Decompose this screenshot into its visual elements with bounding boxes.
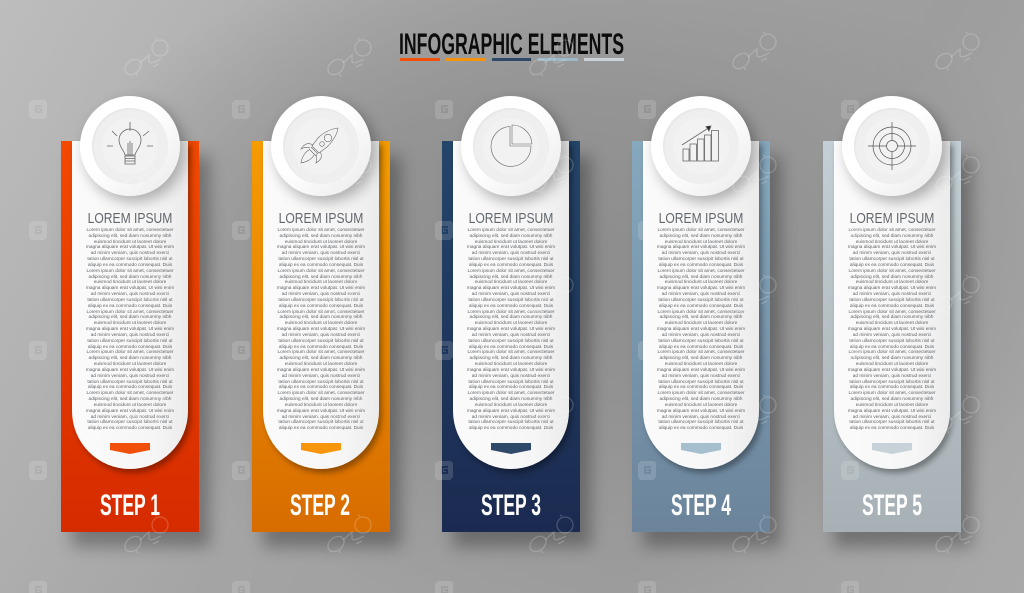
step 5 body text: ad minim veniam, quis nostrud exerci (853, 251, 931, 256)
step 2 body text: tation ullamcorper suscipit lobortis nisl ut (278, 380, 364, 385)
step 5 body text: Lorem ipsum dolor sit amet, consectetuer (848, 269, 936, 274)
step 2 body text: Lorem ipsum dolor sit amet, consectetuer (277, 310, 365, 315)
step 2 body text: euismod tincidunt ut laoreet dolore (285, 321, 357, 326)
step 2 arrow tab (301, 443, 341, 454)
step 3 body text: aliquip ex ea commodo consequat. Duis (469, 304, 553, 309)
step 2 colour card (252, 141, 390, 532)
step 1 body text: aliquip ex ea commodo consequat. Duis (88, 304, 172, 309)
step 4 body text: magna aliquam erat volutpat. Ut wisi enim (657, 286, 745, 291)
step 2 body text: adipiscing elit, sed diam nonummy nibh (280, 356, 362, 361)
step 1 body text: tation ullamcorper suscipit lobortis nisl ut (87, 380, 173, 385)
step 3 body text: tation ullamcorper suscipit lobortis nisl ut (468, 257, 554, 262)
step 3 body text: aliquip ex ea commodo consequat. Duis (469, 263, 553, 268)
step 4 body text: aliquip ex ea commodo consequat. Duis (659, 263, 743, 268)
step 2 body text: ad minim veniam, quis nostrud exerci (282, 292, 360, 297)
step 3 body text: ad minim veniam, quis nostrud exerci (472, 374, 550, 379)
icon: pie chart (490, 124, 532, 167)
step 4 body text: magna aliquam erat volutpat. Ut wisi enim (657, 409, 745, 414)
step 2 body text: euismod tincidunt ut laoreet dolore (285, 403, 357, 408)
step 2 body text: aliquip ex ea commodo consequat. Duis (279, 304, 363, 309)
step 4 body text: euismod tincidunt ut laoreet dolore (665, 240, 737, 245)
step 1 body text: adipiscing elit, sed diam nonummy nibh (89, 315, 171, 320)
step 3 body text: magna aliquam erat volutpat. Ut wisi enim (467, 286, 555, 291)
step 3 body text: magna aliquam erat volutpat. Ut wisi enim (467, 327, 555, 332)
step 2 body text: magna aliquam erat volutpat. Ut wisi enim (277, 286, 365, 291)
step 1 body text: aliquip ex ea commodo consequat. Duis (88, 385, 172, 390)
step 3 body text: aliquip ex ea commodo consequat. Duis (469, 426, 553, 431)
step 2 body text: euismod tincidunt ut laoreet dolore (285, 362, 357, 367)
step 4 body text: aliquip ex ea commodo consequat. Duis (659, 385, 743, 390)
step 4 body text: magna aliquam erat volutpat. Ut wisi enim (657, 245, 745, 250)
step 5 body text: magna aliquam erat volutpat. Ut wisi enim (848, 327, 936, 332)
step 4 body text: Lorem ipsum dolor sit amet, consectetuer (657, 310, 745, 315)
step 4 body text: tation ullamcorper suscipit lobortis nisl ut (658, 257, 744, 262)
step 5 body text: magna aliquam erat volutpat. Ut wisi enim (848, 245, 936, 250)
step 1 body text: aliquip ex ea commodo consequat. Duis (88, 263, 172, 268)
step 5 body text: adipiscing elit, sed diam nonummy nibh (851, 315, 933, 320)
step 3 body text (467, 228, 555, 431)
step 2 body text: magna aliquam erat volutpat. Ut wisi enim (277, 368, 365, 373)
step 5 body text: tation ullamcorper suscipit lobortis nisl ut (849, 339, 935, 344)
step 5 disc (842, 96, 942, 196)
step 5 body text: aliquip ex ea commodo consequat. Duis (850, 426, 934, 431)
step 3 body text: Lorem ipsum dolor sit amet, consectetuer (467, 310, 555, 315)
panel: step 5 (823, 96, 980, 554)
step 2 body text: magna aliquam erat volutpat. Ut wisi enim (277, 327, 365, 332)
step 4 body text: adipiscing elit, sed diam nonummy nibh (660, 275, 742, 280)
step 1 body text: tation ullamcorper suscipit lobortis nisl ut (87, 339, 173, 344)
step 1 body text: ad minim veniam, quis nostrud exerci (91, 292, 169, 297)
step 5 body text: aliquip ex ea commodo consequat. Duis (850, 263, 934, 268)
panel: step 3 (442, 96, 598, 554)
step 5 heading: LOREM IPSUM (850, 211, 934, 227)
step 3 body text: Lorem ipsum dolor sit amet, consectetuer (467, 269, 555, 274)
step 2 body text: ad minim veniam, quis nostrud exerci (282, 333, 360, 338)
step 4 body text: adipiscing elit, sed diam nonummy nibh (660, 234, 742, 239)
step 1 body text: adipiscing elit, sed diam nonummy nibh (89, 275, 171, 280)
step 2 body text: ad minim veniam, quis nostrud exerci (282, 414, 360, 420)
step 4 body text: ad minim veniam, quis nostrud exerci (662, 414, 740, 420)
step 4 body text: ad minim veniam, quis nostrud exerci (662, 292, 740, 297)
step 3 body text: tation ullamcorper suscipit lobortis nisl ut (468, 339, 554, 344)
step 3 arrow tab (491, 443, 531, 454)
step 3 body text: Lorem ipsum dolor sit amet, consectetuer (467, 228, 555, 233)
step 4 body text: aliquip ex ea commodo consequat. Duis (659, 426, 743, 431)
step 2 body text: magna aliquam erat volutpat. Ut wisi enim (277, 245, 365, 250)
step 1 body text: tation ullamcorper suscipit lobortis nisl ut (87, 257, 173, 262)
step 1 body text: magna aliquam erat volutpat. Ut wisi enim (86, 327, 174, 332)
step 5 body text: ad minim veniam, quis nostrud exerci (853, 374, 931, 379)
step 2 body text: tation ullamcorper suscipit lobortis nisl ut (278, 420, 364, 425)
step 1 heading: LOREM IPSUM (88, 211, 172, 227)
step 5 body text: tation ullamcorper suscipit lobortis nisl ut (849, 257, 935, 262)
step 4 body text: Lorem ipsum dolor sit amet, consectetuer (657, 391, 745, 396)
step 1 body text: ad minim veniam, quis nostrud exerci (91, 251, 169, 256)
step 4 body text: aliquip ex ea commodo consequat. Duis (659, 304, 743, 309)
step 1 body text: ad minim veniam, quis nostrud exerci (91, 374, 169, 379)
step 4 white pill (643, 141, 759, 469)
step 4 body text: tation ullamcorper suscipit lobortis nisl ut (658, 298, 744, 303)
step 2 body text: aliquip ex ea commodo consequat. Duis (279, 385, 363, 390)
step 5 white pill (834, 141, 950, 469)
step 3 body text: tation ullamcorper suscipit lobortis nisl ut (468, 380, 554, 385)
step 5 body text: magna aliquam erat volutpat. Ut wisi enim (848, 368, 936, 373)
step 2 disc (271, 96, 371, 196)
step 1 body text: euismod tincidunt ut laoreet dolore (94, 321, 166, 326)
step 1 white pill (72, 141, 188, 469)
step 5 body text: tation ullamcorper suscipit lobortis nisl ut (849, 420, 935, 425)
step 4 body text: Lorem ipsum dolor sit amet, consectetuer (657, 228, 745, 233)
step 3 body text: euismod tincidunt ut laoreet dolore (475, 321, 547, 326)
step 2 body text: aliquip ex ea commodo consequat. Duis (279, 345, 363, 350)
step 5 arrow tab (872, 443, 912, 454)
step 3 white pill (453, 141, 569, 469)
step 4 body text: euismod tincidunt ut laoreet dolore (665, 280, 737, 285)
step 1 body text: Lorem ipsum dolor sit amet, consectetuer (86, 310, 174, 315)
step 2 body text: tation ullamcorper suscipit lobortis nisl ut (278, 257, 364, 262)
step 5 body text: tation ullamcorper suscipit lobortis nisl ut (849, 380, 935, 385)
step 1 colour card (61, 141, 199, 532)
step 4 body text: adipiscing elit, sed diam nonummy nibh (660, 356, 742, 361)
step 3 body text: ad minim veniam, quis nostrud exerci (472, 333, 550, 338)
step 3 body text: adipiscing elit, sed diam nonummy nibh (470, 234, 552, 239)
step 2 body text: Lorem ipsum dolor sit amet, consectetuer (277, 228, 365, 233)
step 1 body text (86, 228, 174, 431)
step 4 body text: euismod tincidunt ut laoreet dolore (665, 362, 737, 367)
step 5 body text: euismod tincidunt ut laoreet dolore (856, 240, 928, 245)
step 3 body text: adipiscing elit, sed diam nonummy nibh (470, 315, 552, 320)
step 3 body text: euismod tincidunt ut laoreet dolore (475, 280, 547, 285)
panel: step 4 (632, 96, 788, 554)
icon: growth bar chart (682, 126, 719, 162)
step 3 body text: euismod tincidunt ut laoreet dolore (475, 240, 547, 245)
step 4 body text: tation ullamcorper suscipit lobortis nisl ut (658, 339, 744, 344)
step 1 body text: magna aliquam erat volutpat. Ut wisi enim (86, 245, 174, 250)
step 5 body text: tation ullamcorper suscipit lobortis nisl ut (849, 298, 935, 303)
step 4 disc (651, 96, 751, 196)
step 5 body text: euismod tincidunt ut laoreet dolore (856, 362, 928, 367)
step 3 body text: adipiscing elit, sed diam nonummy nibh (470, 397, 552, 402)
step 2 body text: ad minim veniam, quis nostrud exerci (282, 374, 360, 379)
step 1 body text: ad minim veniam, quis nostrud exerci (91, 333, 169, 338)
step 5 body text: magna aliquam erat volutpat. Ut wisi enim (848, 286, 936, 291)
step 1 body text: Lorem ipsum dolor sit amet, consectetuer (86, 269, 174, 274)
step 2 body text: aliquip ex ea commodo consequat. Duis (279, 426, 363, 431)
step 4 body text: adipiscing elit, sed diam nonummy nibh (660, 315, 742, 320)
icon: target (868, 122, 916, 170)
panel: step 1 (61, 96, 218, 555)
step 4 body text: tation ullamcorper suscipit lobortis nisl ut (658, 420, 744, 425)
step 5 body text: ad minim veniam, quis nostrud exerci (853, 333, 931, 338)
step 3 body text: adipiscing elit, sed diam nonummy nibh (470, 275, 552, 280)
step 3 body text: adipiscing elit, sed diam nonummy nibh (470, 356, 552, 361)
step 4 body text: ad minim veniam, quis nostrud exerci (662, 333, 740, 338)
step 5 body text: euismod tincidunt ut laoreet dolore (856, 280, 928, 285)
step 2 body text: tation ullamcorper suscipit lobortis nisl ut (278, 339, 364, 344)
step 1 body text: Lorem ipsum dolor sit amet, consectetuer (86, 350, 174, 355)
step 4 body text: euismod tincidunt ut laoreet dolore (665, 321, 737, 326)
icon: light bulb (107, 122, 153, 164)
step 1 body text: euismod tincidunt ut laoreet dolore (94, 362, 166, 367)
step 4 body text: adipiscing elit, sed diam nonummy nibh (660, 397, 742, 402)
step 2 body text: ad minim veniam, quis nostrud exerci (282, 251, 360, 256)
step 5 body text: adipiscing elit, sed diam nonummy nibh (851, 397, 933, 402)
step 1 body text: ad minim veniam, quis nostrud exerci (91, 414, 169, 420)
panel: step 2 (252, 96, 408, 554)
step 3 disc (461, 96, 561, 196)
step 5 body text: adipiscing elit, sed diam nonummy nibh (851, 234, 933, 239)
step 1 body text: magna aliquam erat volutpat. Ut wisi enim (86, 368, 174, 373)
step 4 arrow tab (681, 443, 721, 454)
step 5 body text: aliquip ex ea commodo consequat. Duis (850, 345, 934, 350)
step 3 body text: tation ullamcorper suscipit lobortis nisl ut (468, 420, 554, 425)
step 4 body text: aliquip ex ea commodo consequat. Duis (659, 345, 743, 350)
step 2 body text: Lorem ipsum dolor sit amet, consectetuer (277, 391, 365, 396)
step 3 body text: aliquip ex ea commodo consequat. Duis (469, 345, 553, 350)
step 2 body text: adipiscing elit, sed diam nonummy nibh (280, 234, 362, 239)
step 2 heading: LOREM IPSUM (279, 211, 363, 227)
step 3 body text: Lorem ipsum dolor sit amet, consectetuer (467, 391, 555, 396)
step 5 body text (848, 228, 936, 431)
step 2 body text: aliquip ex ea commodo consequat. Duis (279, 263, 363, 268)
step 1 body text: adipiscing elit, sed diam nonummy nibh (89, 397, 171, 402)
title colour bars (400, 58, 624, 61)
step 1 arrow tab (110, 443, 150, 454)
step 3 body text: aliquip ex ea commodo consequat. Duis (469, 385, 553, 390)
step 4 body text: ad minim veniam, quis nostrud exerci (662, 374, 740, 379)
step 5 body text: ad minim veniam, quis nostrud exerci (853, 292, 931, 297)
step 3 body text: euismod tincidunt ut laoreet dolore (475, 362, 547, 367)
step 5 body text: aliquip ex ea commodo consequat. Duis (850, 304, 934, 309)
step 1 disc (80, 96, 180, 196)
step 3 body text: magna aliquam erat volutpat. Ut wisi enim (467, 368, 555, 373)
step 3 body text: ad minim veniam, quis nostrud exerci (472, 414, 550, 420)
step 4 body text (657, 228, 745, 431)
step 5 body text: Lorem ipsum dolor sit amet, consectetuer (848, 228, 936, 233)
step 4 body text: magna aliquam erat volutpat. Ut wisi enim (657, 368, 745, 373)
step 4 body text: Lorem ipsum dolor sit amet, consectetuer (657, 350, 745, 355)
step 2 body text: Lorem ipsum dolor sit amet, consectetuer (277, 269, 365, 274)
step 1 body text: Lorem ipsum dolor sit amet, consectetuer (86, 391, 174, 396)
step 3 colour card (442, 141, 580, 532)
step 4 body text: ad minim veniam, quis nostrud exerci (662, 251, 740, 256)
step 2 body text: adipiscing elit, sed diam nonummy nibh (280, 275, 362, 280)
step 4 body text: tation ullamcorper suscipit lobortis nisl ut (658, 380, 744, 385)
step 1 body text: euismod tincidunt ut laoreet dolore (94, 240, 166, 245)
step 5 body text: Lorem ipsum dolor sit amet, consectetuer (848, 391, 936, 396)
step 1 body text: magna aliquam erat volutpat. Ut wisi enim (86, 286, 174, 291)
step 1 body text: adipiscing elit, sed diam nonummy nibh (89, 356, 171, 361)
step 2 body text (277, 228, 365, 431)
step 4 body text: magna aliquam erat volutpat. Ut wisi enim (657, 327, 745, 332)
step 1 body text: tation ullamcorper suscipit lobortis nisl ut (87, 420, 173, 425)
step 5 body text: euismod tincidunt ut laoreet dolore (856, 321, 928, 326)
step 3 body text: magna aliquam erat volutpat. Ut wisi enim (467, 409, 555, 414)
step 1 body text: euismod tincidunt ut laoreet dolore (94, 403, 166, 408)
step 5 body text: aliquip ex ea commodo consequat. Duis (850, 385, 934, 390)
step 3 body text: euismod tincidunt ut laoreet dolore (475, 403, 547, 408)
step 2 body text: adipiscing elit, sed diam nonummy nibh (280, 315, 362, 320)
step 1 body text: aliquip ex ea commodo consequat. Duis (88, 345, 172, 350)
step 2 body text: Lorem ipsum dolor sit amet, consectetuer (277, 350, 365, 355)
step 2 body text: tation ullamcorper suscipit lobortis nisl ut (278, 298, 364, 303)
step 1 body text: magna aliquam erat volutpat. Ut wisi enim (86, 409, 174, 414)
step 3 heading: LOREM IPSUM (469, 211, 553, 227)
step 3 body text: magna aliquam erat volutpat. Ut wisi enim (467, 245, 555, 250)
step 1 body text: aliquip ex ea commodo consequat. Duis (88, 426, 172, 431)
step 4 heading: LOREM IPSUM (659, 211, 743, 227)
step 5 body text: Lorem ipsum dolor sit amet, consectetuer (848, 350, 936, 355)
step 4 colour card (632, 141, 770, 532)
step 5 body text: adipiscing elit, sed diam nonummy nibh (851, 356, 933, 361)
step 1 body text: euismod tincidunt ut laoreet dolore (94, 280, 166, 285)
step 3 body text: Lorem ipsum dolor sit amet, consectetuer (467, 350, 555, 355)
step 2 body text: magna aliquam erat volutpat. Ut wisi enim (277, 409, 365, 414)
step 5 body text: Lorem ipsum dolor sit amet, consectetuer (848, 310, 936, 315)
step 4 body text: Lorem ipsum dolor sit amet, consectetuer (657, 269, 745, 274)
step 2 white pill (263, 141, 379, 469)
step 2 body text: euismod tincidunt ut laoreet dolore (285, 240, 357, 245)
step 5 body text: adipiscing elit, sed diam nonummy nibh (851, 275, 933, 280)
step 3 body text: ad minim veniam, quis nostrud exerci (472, 251, 550, 256)
icon: rocket (300, 128, 338, 164)
step 5 body text: magna aliquam erat volutpat. Ut wisi enim (848, 409, 936, 414)
step 5 colour card (823, 141, 961, 532)
step 1 body text: Lorem ipsum dolor sit amet, consectetuer (86, 228, 174, 233)
step 3 body text: tation ullamcorper suscipit lobortis nisl ut (468, 298, 554, 303)
step 5 body text: euismod tincidunt ut laoreet dolore (856, 403, 928, 408)
step 1 body text: tation ullamcorper suscipit lobortis nisl ut (87, 298, 173, 303)
step 1 body text: adipiscing elit, sed diam nonummy nibh (89, 234, 171, 239)
step 5 body text: ad minim veniam, quis nostrud exerci (853, 414, 931, 420)
step 2 body text: adipiscing elit, sed diam nonummy nibh (280, 397, 362, 402)
step 2 body text: euismod tincidunt ut laoreet dolore (285, 280, 357, 285)
step 4 body text: euismod tincidunt ut laoreet dolore (665, 403, 737, 408)
step 3 body text: ad minim veniam, quis nostrud exerci (472, 292, 550, 297)
